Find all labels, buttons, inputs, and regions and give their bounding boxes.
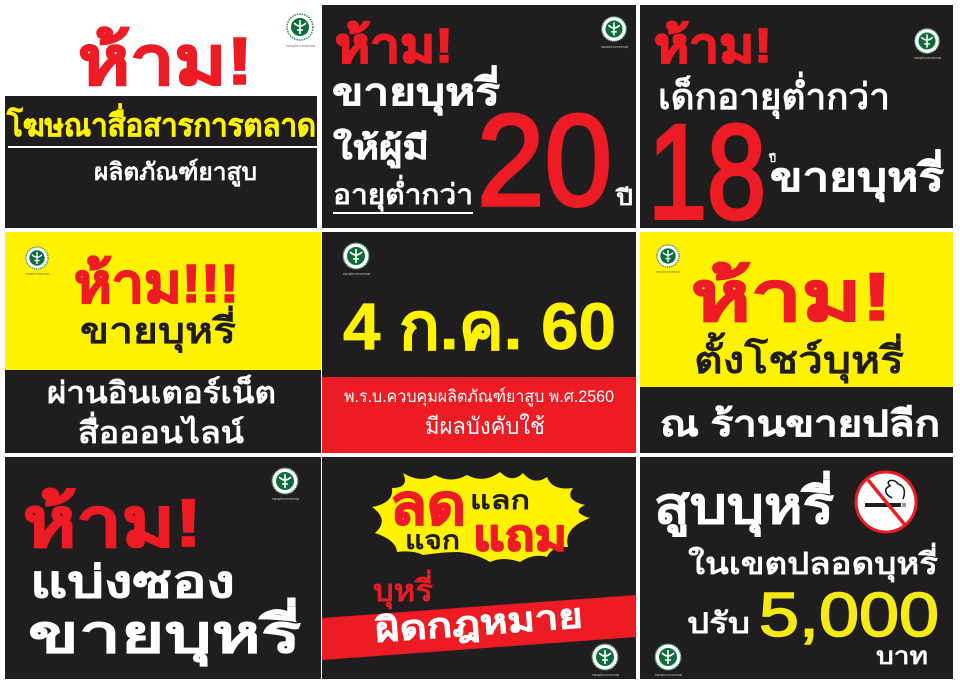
starburst: [372, 472, 590, 562]
logo: [272, 468, 299, 502]
text: baht: บาท: [876, 643, 928, 670]
text: online media: สื่อออนไลน์: [78, 411, 245, 450]
text: smoking: สูบบุหรี่: [654, 471, 834, 537]
text: to persons: ให้ผู้มี: [333, 128, 429, 169]
text: sell cigarettes: ขายบุหรี่: [770, 149, 945, 203]
text: sell cigarettes: ขายบุหรี่: [28, 598, 301, 667]
logo: กรมควบคุมโรค กระทรวงสาธารณสุข: [601, 44, 628, 50]
underline: [333, 212, 473, 214]
logo: กรมควบคุมโรค กระทรวงสาธารณสุข: [286, 43, 315, 49]
logo: กรมควบคุมโรค กระทรวงสาธารณสุข: [592, 672, 619, 678]
text: display cigarettes: ตั้งโชว์บุหรี่: [694, 332, 905, 384]
heading: ban: ห้าม!: [23, 485, 202, 561]
text: children under: เด็กอายุต่ำกว่า: [658, 71, 890, 120]
text: fine: ปรับ: [687, 608, 750, 640]
text: sell cigarettes: ขายบุหรี่: [332, 65, 501, 116]
text: give: แจก: [405, 525, 460, 555]
text: years: ปี: [615, 185, 633, 210]
panel: under 20 sale ban: [322, 5, 636, 233]
text: illegal: ผิดกฎหมาย: [374, 597, 584, 650]
red banner: [322, 595, 636, 660]
panel: split pack ban: [5, 457, 321, 679]
text: via internet: ผ่านอินเตอร์เน็ต: [47, 374, 276, 410]
text: tobacco products: ผลิตภัณฑ์ยาสูบ: [94, 158, 257, 187]
logo: [656, 245, 680, 275]
heading: ban: ห้าม!: [335, 20, 453, 73]
panel: discount promo illegal: [322, 457, 636, 679]
text: in non-smoking area: ในเขตปลอดบุหรี่: [688, 542, 938, 583]
text: years: ปี: [768, 152, 776, 165]
logo: [592, 644, 619, 678]
panel: online sale ban: [5, 232, 321, 453]
text: sell cigarettes: ขายบุหรี่: [80, 305, 237, 354]
logo: กรมควบคุมโรค กระทรวงสาธารณสุข: [655, 672, 682, 678]
icon: no smoking: [856, 472, 916, 532]
logo: [914, 29, 941, 61]
panel: display ban: กรมควบคุมโรค กระทรวงสาธารณสุข: [656, 269, 680, 275]
panel: display ban: [640, 232, 953, 453]
logo: กรมควบคุมโรค กระทรวงสาธารณสุข: [272, 496, 299, 502]
logo: กรมควบคุมโรค กระทรวงสาธารณสุข: [343, 271, 370, 277]
text: cigarettes: บุหรี่: [373, 569, 433, 610]
panel: smoking fine: [640, 457, 953, 679]
text: free gift: แถม: [473, 512, 567, 559]
text: split pack: แบ่งซอง: [30, 558, 235, 607]
text: at retail shop: ณ ร้านขายปลีก: [660, 403, 940, 444]
logo: [655, 644, 682, 678]
text: discount: ลด: [390, 473, 466, 536]
panel: effective date: [322, 232, 636, 453]
number 18: 18: [648, 98, 766, 247]
number 5,000: 5,000: [759, 581, 939, 650]
logo: [343, 243, 370, 277]
logo: [601, 17, 628, 50]
logo: [25, 247, 49, 277]
heading: ban: ห้าม!!!: [74, 254, 239, 314]
date: 4 ก.ค. 60: [343, 289, 616, 363]
text: act name: พ.ร.บ.ควบคุมผลิตภัณฑ์ยาสูบ พ.ศ.2560: [344, 387, 614, 407]
heading: ban: ห้าม!: [78, 24, 253, 99]
text: exchange: แลก: [470, 485, 530, 515]
panel: under 18 cannot sell: [640, 5, 953, 247]
panel: online sale ban: กรมควบคุมโรค กระทรวงสาธารณสุข: [25, 271, 49, 277]
text: takes effect: มีผลบังคับใช้: [425, 413, 545, 439]
divider line: [8, 146, 317, 148]
heading: ban: ห้าม!: [654, 20, 772, 73]
subheading: marketing communication: โฆษณาสื่อสารการตลาด: [6, 103, 316, 143]
text: aged under: อายุต่ำกว่า: [333, 174, 473, 212]
heading: ban: ห้าม!: [691, 259, 892, 335]
number 20: 20: [477, 87, 612, 233]
logo: [286, 14, 315, 49]
panel: advertising ban: [5, 14, 317, 228]
